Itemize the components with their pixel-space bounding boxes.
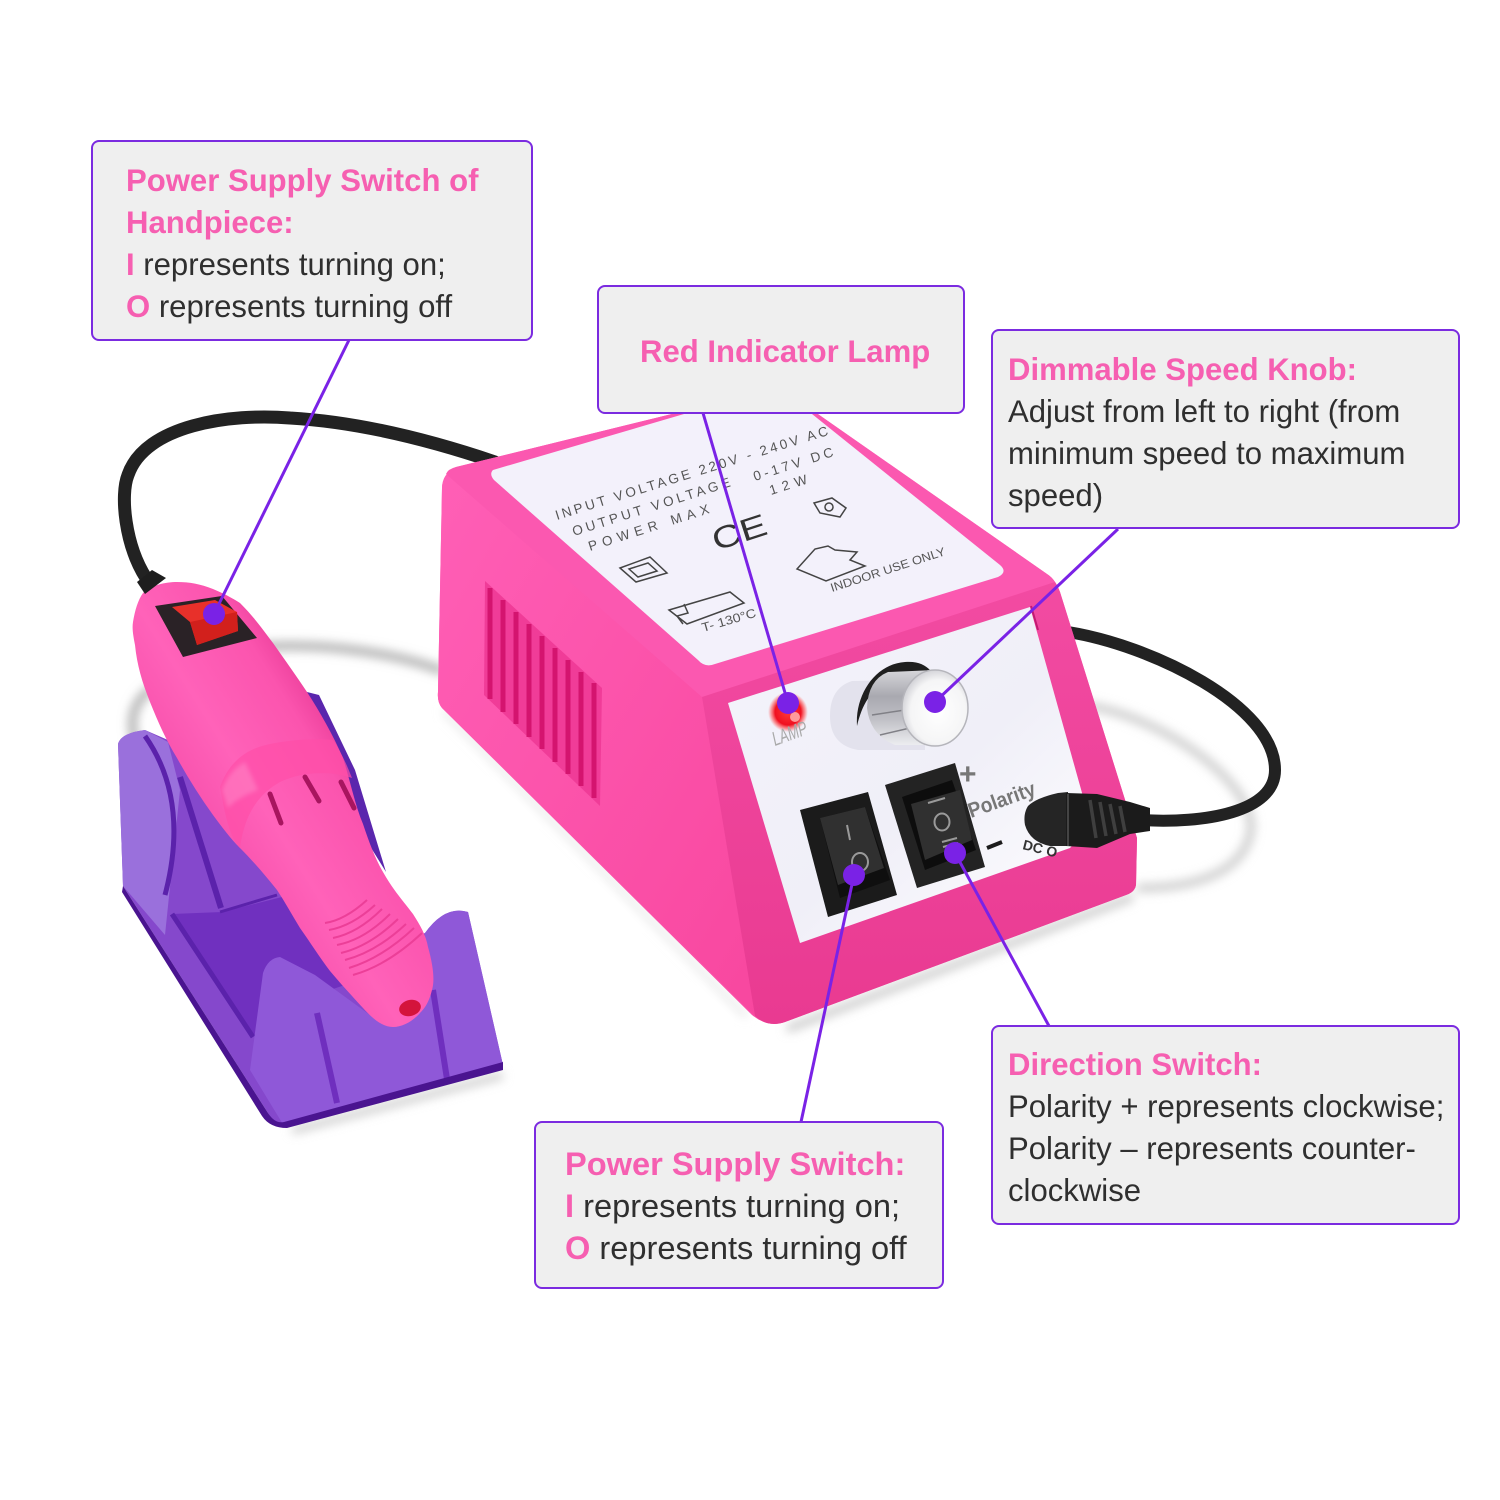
- lamp: [768, 692, 811, 751]
- callout: Dimmable Speed Knob: minimum speed to maximum: [1008, 436, 1405, 471]
- polarity print: DC O: [1021, 836, 1059, 860]
- callout: Power Supply Switch: I represents turning on;: [565, 1187, 900, 1224]
- thermal fuse icon: [669, 592, 744, 624]
- callout: Red Indicator Lamp: [598, 286, 964, 413]
- callout: leader lines and markers: [203, 340, 1118, 1122]
- knob cylinder: [867, 670, 935, 745]
- callout: Direction Switch: Polarity + represents clockwise;: [1008, 1089, 1444, 1124]
- double insulated icon: [620, 557, 667, 582]
- cradle front uprights: [250, 911, 503, 1126]
- label marks: [620, 498, 947, 635]
- label text: 12W: [767, 472, 809, 498]
- front panel: [728, 607, 1091, 943]
- product shadow: [133, 646, 1251, 1130]
- label text: INPUT VOLTAGE 220V - 240V AC: [553, 423, 830, 523]
- callout: Direction Switch: [992, 1026, 1459, 1224]
- direction switch: [885, 763, 985, 888]
- power switch: [800, 792, 897, 917]
- callout: Power Supply Switch of Handpiece: I represents turning on;: [126, 247, 446, 282]
- knob: [830, 662, 968, 750]
- cradle left wall: [118, 730, 180, 935]
- handpiece nozzle ribs: [325, 900, 422, 975]
- callout: Power Supply Switch of Handpiece: [92, 141, 532, 340]
- lamp: LAMP: [769, 718, 811, 751]
- vent slats: [490, 588, 594, 798]
- label text: OUTPUT VOLTAGE: [570, 475, 732, 539]
- handpiece tip: [397, 997, 423, 1019]
- illustration: handpiece: [133, 570, 433, 1027]
- cradle rails: [145, 736, 277, 1037]
- cradle upright bands: [317, 990, 447, 1103]
- label marks: T- 130°C: [700, 606, 758, 635]
- callout: Direction Switch: clockwise: [1008, 1173, 1141, 1208]
- label text: 0-17V DC: [751, 444, 835, 484]
- box front frame: [702, 582, 1137, 1024]
- top label: [491, 414, 1004, 665]
- callout: Red Indicator Lamp: Red Indicator Lamp: [640, 334, 930, 369]
- box silhouette: [438, 412, 1137, 1024]
- safety shield icon: [814, 498, 846, 517]
- callout: Power Supply Switch: Power Supply Switch:: [565, 1145, 905, 1182]
- label marks: INDOOR USE ONLY: [829, 544, 947, 595]
- callout: Dimmable Speed Knob: Dimmable Speed Knob:: [1008, 352, 1357, 387]
- illustration: control box: [438, 412, 1150, 1024]
- cradle inner floor: [172, 895, 345, 1037]
- cradle body: [118, 730, 503, 1126]
- callout: Direction Switch: Polarity – represents counter-: [1008, 1131, 1416, 1166]
- handpiece highlight: [222, 762, 258, 808]
- callout: Dimmable Speed Knob: speed): [1008, 478, 1103, 513]
- callout: Power Supply Switch of Handpiece: Handpiece:: [126, 205, 294, 240]
- panel seam: [1031, 606, 1038, 630]
- illustration: power cords: [124, 417, 1275, 821]
- plug: [1024, 792, 1150, 848]
- callout: Dimmable Speed Knob: Adjust from left to right (from: [1008, 394, 1400, 429]
- illustration: handpiece cradle: [118, 692, 503, 1128]
- polarity print: +: [959, 758, 977, 791]
- handpiece seam band: [220, 739, 352, 848]
- handpiece switch: [155, 596, 257, 657]
- cord strain relief: [137, 570, 166, 594]
- callout: Power Supply Switch of Handpiece: O represents turning off: [126, 289, 452, 324]
- box top: [446, 412, 1055, 697]
- cradle bottom edge: [122, 886, 503, 1128]
- handpiece vents: [270, 777, 354, 823]
- polarity print: [959, 758, 1059, 860]
- label text: POWER MAX: [586, 501, 711, 554]
- knob dark arc: [857, 662, 930, 726]
- polarity print: Polarity: [965, 778, 1039, 823]
- callout: Direction Switch: Direction Switch:: [1008, 1047, 1262, 1082]
- knob backdrop: [830, 680, 925, 750]
- indoor house icon: [797, 546, 865, 581]
- handpiece body: [133, 582, 433, 1027]
- CE mark: CE: [707, 507, 771, 558]
- knob cap: [902, 670, 968, 746]
- callout: Dimmable Speed Knob: [992, 330, 1459, 528]
- callout: Power Supply Switch: O represents turning off: [565, 1229, 908, 1266]
- callout: Power Supply Switch of Handpiece: Power Supply Switch of: [126, 163, 479, 198]
- side vents: [484, 581, 602, 806]
- callout: Power Supply Switch: [535, 1122, 943, 1288]
- cradle back wing: [307, 692, 386, 872]
- box left side: [438, 474, 755, 1016]
